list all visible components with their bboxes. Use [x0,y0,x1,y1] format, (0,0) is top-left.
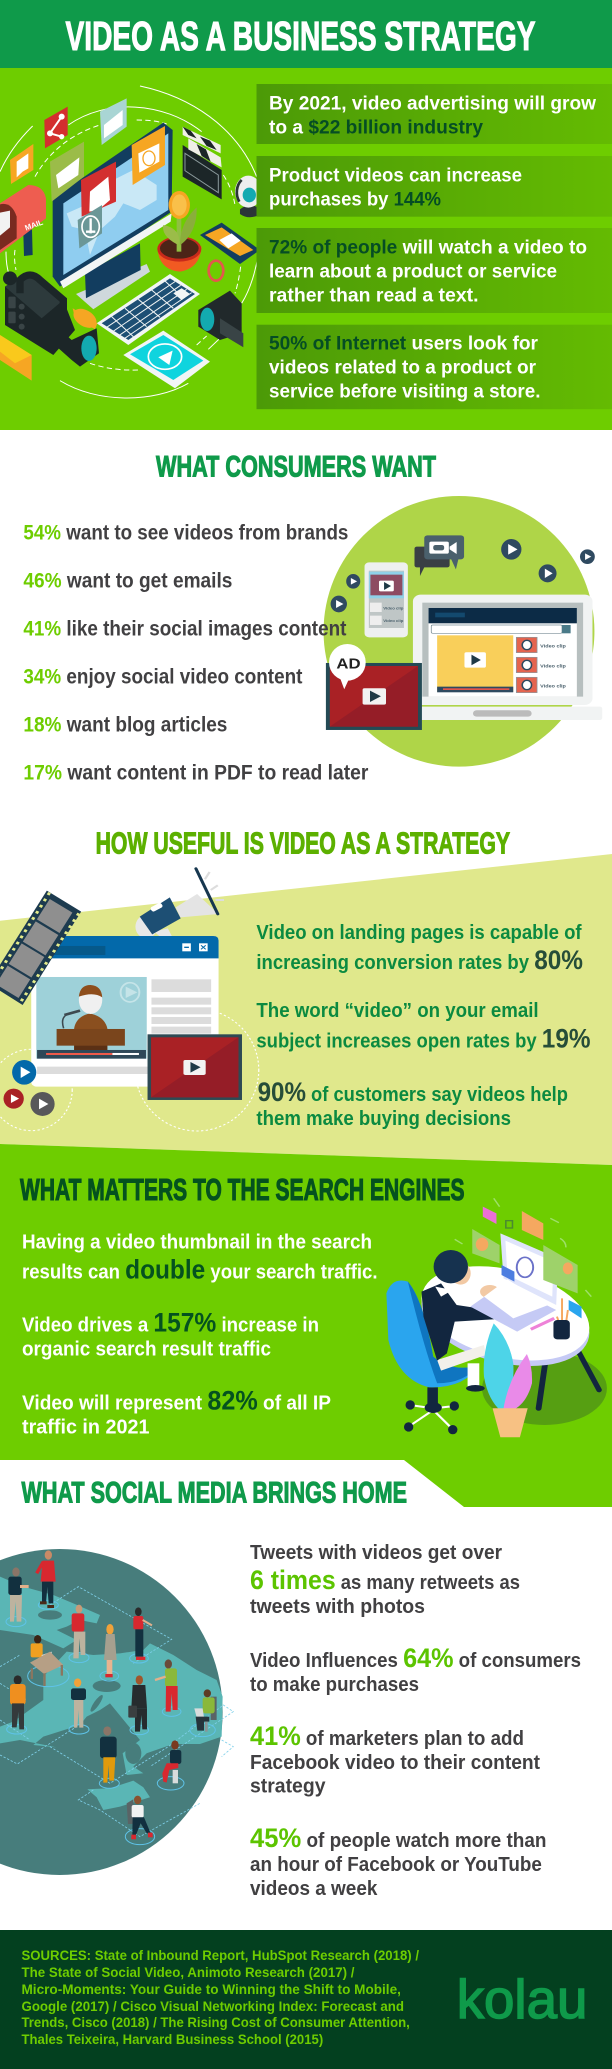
title banner [0,0,612,68]
envelope [0,335,32,381]
person 14 seated [127,1796,153,1839]
sources: Trends, Cisco (2018) / The Rising Cost of Consumer Attention, [22,2015,410,2030]
stat: 144%: Product videos can increase [269,164,522,186]
stat: email subject 19% [256,999,590,1053]
person 9 [71,1678,86,1728]
stat: 157%: organic search result traffic [22,1338,271,1361]
stat: 144%: purchases by 144% [269,188,441,210]
potted plant [484,1323,532,1437]
stat: 157%: Video drives a 157% increase in [22,1308,319,1338]
stat: 41%: 41% of marketers plan to add [250,1721,524,1751]
stat: 82%: traffic in 2021 [22,1416,150,1439]
panel: social media [0,1477,581,1900]
red video ad [326,663,422,730]
footer background [0,1930,612,2069]
desk [407,1249,604,1408]
stat: 82% [22,1385,331,1439]
stat: tweets 6 times: Tweets with videos get over [250,1542,502,1564]
stat: landing pages 80%: Video on landing pages is capable of [256,921,582,944]
person 10 [10,1675,26,1729]
illustration: person at desk [386,1198,607,1437]
ground rings [6,1601,215,1845]
sources: The State of Social Video, Animoto Research (2017) / [22,1965,355,1980]
person 1 [37,1550,56,1608]
stat: double traffic: Having a video thumbnail in the search [22,1230,372,1253]
stat: 50%: 50% of Internet users look for [269,332,538,354]
laptop [413,595,602,720]
intro background [0,68,612,430]
stat: 41%: strategy [250,1776,326,1798]
stat: customers 90%: them make buying decisions [256,1107,511,1130]
stat: 50%: videos related to a product or [269,356,536,378]
window [31,936,219,1087]
stat: 72%: 72% of people will watch a video to [269,236,587,258]
person 2 [8,1567,29,1622]
play buttons [331,539,595,612]
AD bubble: AD [336,657,361,672]
section background [0,854,612,1165]
person 13 seated [162,1740,181,1783]
stat: 45%: an hour of Facebook or YouTube [250,1854,542,1876]
stat: 22 billion: to a $22 billion industry [269,116,483,138]
person 4 [104,1624,117,1677]
stat: tweets 6 times: 6 times as many retweets as [250,1565,520,1595]
stat: tweets 6 times: tweets with photos [250,1596,425,1618]
stat: landing pages 80% [256,921,583,975]
panel: how useful is video [0,825,612,1165]
heading: WHAT SOCIAL MEDIA BRINGS HOME [22,1477,407,1510]
chair [386,1280,479,1434]
consumer statistics list [23,521,368,784]
stat: 72%: rather than read a text. [269,284,478,306]
laptop: Video clip [540,684,566,689]
section background [0,1144,612,1507]
megaphone [135,869,224,938]
mailbox [0,185,46,256]
AD bubble [329,644,366,689]
illustration: video webinar window [0,869,259,1131]
at sign [209,261,223,281]
smartphone [200,223,260,264]
mailbox: MAIL [24,218,45,233]
panel: search engines [0,1144,612,1507]
34%: 34% enjoy social video content [23,665,302,688]
stat: 41%: Facebook video to their content [250,1752,540,1774]
sources: Google (2017) / Cisco Visual Networking Index: Forecast and [22,1999,404,2014]
illustration: video devices [0,86,262,398]
stat: 157% [22,1308,319,1361]
floating tiles [10,98,165,248]
stat: 82%: Video will represent 82% of all IP [22,1385,331,1415]
17%: 17% want content in PDF to read later [23,761,368,784]
stat: email subject 19%: subject increases open rates by 19% [256,1023,590,1053]
stat: 50% [256,325,612,409]
monitor [53,123,173,309]
sources: Thales Teixeira, Harvard Business School (2015) [22,2032,323,2047]
laptop [470,1233,558,1332]
stat: customers 90%: 90% of customers say videos help [258,1077,568,1107]
person 11 seated with laptop [194,1689,217,1732]
video camera large [3,271,100,367]
stat: 64% [250,1643,581,1696]
clapperboard [183,127,222,199]
stat: 64%: to make purchases [250,1674,419,1696]
panel: intro [0,0,612,430]
46%: 46% want to get emails [23,569,232,592]
panel: what consumers want [23,451,602,784]
person 8 suit [128,1675,147,1732]
illustration: video devices on green circle [324,496,602,767]
red video player [148,1034,242,1100]
stat: 22 billion [256,84,612,144]
stat: 45%: videos a week [250,1878,378,1900]
play buttons [4,1060,55,1116]
stat: 41% [250,1721,540,1798]
speech bubbles camera [414,535,464,576]
41%: 41% like their social images content [23,617,346,640]
keyboard [97,274,200,345]
stat: 144% [256,156,612,217]
sources: SOURCES: State of Inbound Report, HubSpot Research (2018) / [22,1948,419,1963]
stat: double traffic [22,1230,378,1284]
person 6 seated at desk [30,1635,63,1686]
stat: 22 billion: By 2021, video advertising will grow [269,92,597,114]
tablet [123,331,210,388]
sources [22,1948,419,2047]
person [422,1250,525,1392]
laptop: Video clip [540,664,566,669]
floating code icons [455,1198,591,1318]
land masses [0,1577,223,1810]
person 5 [133,1607,152,1660]
stat: double traffic: results can double your search traffic. [22,1254,378,1284]
stat: 72% [256,228,612,313]
stat: 64%: Video Influences 64% of consumers [250,1643,581,1673]
heading: WHAT CONSUMERS WANT [156,451,436,484]
stat: landing pages 80%: increasing conversion rates by 80% [256,945,583,975]
stat: tweets 6 times [250,1542,520,1618]
phone: Video clip [383,618,404,623]
stat: 50%: service before visiting a store. [269,380,540,402]
person 3 [72,1605,85,1658]
film strip [0,891,81,1005]
logo: kolau: kolau [457,1968,587,2030]
panel: footer [0,1930,612,2069]
person 12 [100,1726,117,1783]
phone: Video clip [383,606,404,610]
illustration: people on globe [0,1549,233,1875]
stat: 45%: 45% of people watch more than [250,1823,546,1853]
pen cup and wrench [531,1298,570,1339]
stat: 45% [250,1823,546,1900]
camcorder small [198,291,243,347]
speaker at podium [37,985,146,1059]
stat: 72%: learn about a product or service [269,260,557,282]
plant with coin [157,191,202,272]
18%: 18% want blog articles [23,713,227,736]
laptop: Video clip [540,644,566,649]
phone [365,562,408,637]
stat: email subject 19%: The word “video” on your email [256,999,539,1022]
54%: 54% want to see videos from brands [23,521,348,544]
person 7 [155,1659,178,1712]
sources: Micro-Moments: Your Guide to Winning the Shift to Mobile, [22,1982,401,1997]
stat: customers 90% [256,1077,568,1130]
webcam [235,176,262,217]
